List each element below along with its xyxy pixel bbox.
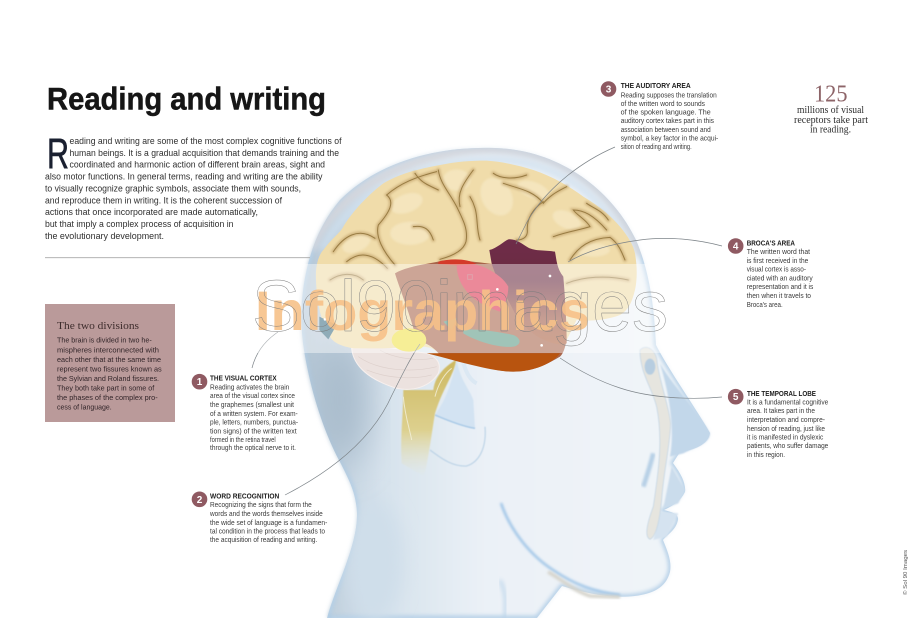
callout 4: Broca's area: representation and it is bbox=[747, 284, 814, 291]
stat: 125 millions of visual receptors bbox=[794, 82, 868, 135]
credit: © Sol 90 Images bbox=[902, 550, 909, 595]
watermark text: Sol90images bbox=[252, 267, 668, 347]
green region bbox=[463, 330, 520, 347]
callout 4: Broca's area: ciated with an auditory bbox=[747, 276, 813, 282]
stat: 125 millions of visual receptors: 125 bbox=[814, 82, 848, 108]
callout 4: Broca's area: then when it travels to bbox=[747, 293, 811, 300]
panel text: represent two fissures known as bbox=[57, 365, 162, 374]
callout 4: Broca's area: visual cortex is asso- bbox=[747, 266, 806, 274]
number badge 2: 2 bbox=[197, 495, 203, 506]
number badge 5: 5 bbox=[733, 392, 739, 403]
callout 1: the visual cortex: area of the visual cortex since bbox=[210, 393, 295, 400]
Broca's area bbox=[489, 239, 567, 344]
callout 5: the temporal lobe: area. It takes part in the bbox=[747, 408, 815, 415]
callout 1: the visual cortex: formed in the retina travel bbox=[210, 437, 276, 444]
callout 3: the auditory area: association between sound and bbox=[621, 127, 711, 134]
intro paragraph: eading and writing are some of the most complex cognitive functions of bbox=[70, 136, 342, 147]
panel heading: The two divisions bbox=[57, 320, 139, 332]
panel text: The brain is divided in two he- bbox=[57, 336, 152, 345]
panel: the two divisions bbox=[45, 304, 175, 422]
intro paragraph bbox=[45, 130, 342, 242]
cerebellum bbox=[352, 347, 439, 389]
callout 3: the auditory area: of the written word to sounds bbox=[621, 101, 706, 108]
panel text: They both take part in some of bbox=[57, 384, 155, 393]
cortex highlights bbox=[340, 169, 610, 257]
callout 5: the temporal lobe: hension of reading, just like bbox=[747, 426, 825, 433]
head illustration bbox=[301, 148, 710, 618]
jaw crease bbox=[501, 503, 620, 595]
callout 3: the auditory area: Reading supposes the translation bbox=[621, 92, 717, 100]
stat: 125 millions of visual receptors: receptors take part bbox=[794, 115, 868, 126]
intro paragraph: but that imply a complex process of acquisition in bbox=[45, 219, 234, 230]
callout 5: the temporal lobe: patients, who suffer damage bbox=[747, 443, 828, 450]
number badge 1: 1 bbox=[197, 377, 203, 388]
visual cortex bbox=[319, 317, 337, 339]
callout 3: the auditory area bbox=[601, 81, 718, 151]
red cap bbox=[438, 259, 477, 265]
word recognition yellow bbox=[392, 328, 426, 352]
callout 5: the temporal lobe: interpretation and compre- bbox=[747, 417, 825, 424]
callout 2: word recognition bbox=[192, 492, 327, 544]
sulci bbox=[330, 170, 628, 283]
jaw bone outline bbox=[430, 360, 485, 466]
callout 2: word recognition: WORD RECOGNITION bbox=[210, 493, 279, 500]
callout 1: the visual cortex: ple, letters, numbers, punctua- bbox=[210, 420, 298, 426]
callout 5: the temporal lobe: It is a fundamental cognitive bbox=[747, 400, 828, 406]
temporal lobe orange bbox=[427, 353, 560, 372]
callout 4: Broca's area: BROCA'S AREA bbox=[747, 240, 795, 248]
callout 3: the auditory area: sition of reading and writing. bbox=[621, 144, 692, 151]
callout 4: Broca's area: Broca's area. bbox=[747, 302, 783, 309]
temporal lobe base bbox=[395, 260, 567, 372]
nose and lips shading bbox=[643, 363, 710, 540]
callout 1: the visual cortex: of a written system. For exam- bbox=[210, 411, 298, 418]
callout 5: the temporal lobe: THE TEMPORAL LOBE bbox=[747, 391, 816, 398]
callout 1: the visual cortex: tion signs) of the written text bbox=[210, 428, 297, 436]
intro paragraph: actions that once incorporated are made automatically, bbox=[45, 207, 258, 218]
head shading bbox=[301, 148, 710, 618]
callout 5: the temporal lobe bbox=[728, 389, 828, 459]
title: Reading and writing bbox=[47, 80, 326, 116]
cerebral cortex bbox=[316, 161, 637, 370]
intro paragraph: also motor functions. In general terms, reading and writing are the ability bbox=[45, 172, 323, 183]
callout 1: the visual cortex: Reading activates the brain bbox=[210, 384, 289, 392]
intro paragraph: the evolutionary development. bbox=[45, 231, 164, 242]
facial skull strip bbox=[640, 347, 671, 539]
small markers bbox=[324, 275, 551, 347]
intro paragraph: and reproduce them in writing. It is the coherent succession of bbox=[45, 195, 282, 206]
panel text: the Sylvian and Roland fissures. bbox=[57, 374, 159, 383]
callout 3: the auditory area: auditory cortex takes part in this bbox=[621, 118, 715, 125]
watermark band bbox=[250, 264, 675, 353]
number badge 3: 3 bbox=[606, 84, 612, 96]
drop cap: R bbox=[47, 130, 69, 178]
intro paragraph: to visually recognize graphic symbols, associate them with sounds, bbox=[45, 184, 301, 194]
callout 1: the visual cortex: the graphemes (smallest unit bbox=[210, 402, 294, 409]
callout 2: word recognition: the wide set of language is a fundamen- bbox=[210, 520, 327, 527]
panel text: mispheres interconnected with bbox=[57, 346, 159, 355]
panel text bbox=[57, 336, 162, 412]
callout 5: the temporal lobe: in this region. bbox=[747, 452, 785, 459]
callout 4: Broca's area: is first received in the bbox=[747, 258, 808, 265]
spinal cord bbox=[401, 360, 456, 477]
panel text: the phases of the complex pro- bbox=[57, 393, 158, 402]
intro paragraph: coordinated and harmonic action of different brain areas, sight and bbox=[70, 160, 325, 171]
intro paragraph: human beings. It is a gradual acquisition that demands training and the bbox=[70, 148, 339, 159]
number badge 4: 4 bbox=[733, 242, 739, 252]
panel text: cess of language. bbox=[57, 403, 112, 412]
callout 1: the visual cortex: through the optical nerve to it. bbox=[210, 445, 296, 452]
callout 4: Broca's area: The written word that bbox=[747, 249, 810, 256]
callout 1: the visual cortex: THE VISUAL CORTEX bbox=[210, 376, 277, 383]
callout 3: the auditory area: symbol, a key factor in the acqui- bbox=[621, 136, 718, 142]
callout 5: the temporal lobe: it is manifested in dyslexic bbox=[747, 434, 824, 442]
stat: 125 millions of visual receptors: millions of visual bbox=[797, 105, 864, 116]
callout 2: word recognition: the acquisition of reading and writing. bbox=[210, 537, 317, 544]
watermark text: Infographics bbox=[255, 279, 590, 342]
callout 2: word recognition: tal condition in the process that leads to bbox=[210, 528, 325, 536]
callout 2: word recognition: words and the words themselves inside bbox=[209, 511, 323, 518]
panel text: each other that at the same time bbox=[57, 355, 161, 364]
callout 3: the auditory area: THE AUDITORY AREA bbox=[621, 83, 691, 90]
callout 2: word recognition: Recognizing the signs that form the bbox=[210, 502, 312, 509]
sulci shadow bbox=[330, 170, 628, 283]
callout 1: the visual cortex bbox=[192, 374, 298, 452]
callout 3: the auditory area: of the spoken language. The bbox=[621, 110, 711, 116]
head silhouette bbox=[301, 148, 710, 618]
auditory area pink bbox=[457, 263, 508, 312]
stat: 125 millions of visual receptors: in reading. bbox=[810, 124, 851, 135]
callout 4: Broca's area bbox=[728, 238, 814, 309]
brain bbox=[316, 161, 637, 372]
leader lines bbox=[252, 147, 722, 495]
